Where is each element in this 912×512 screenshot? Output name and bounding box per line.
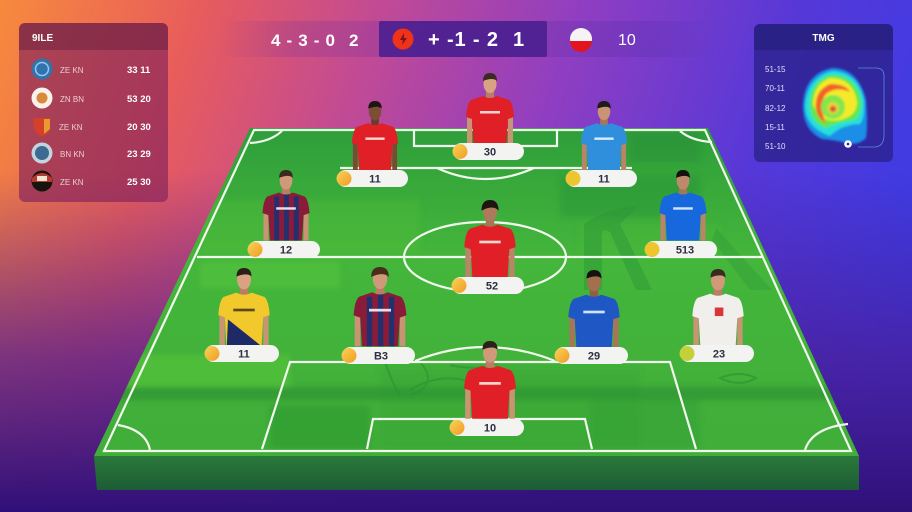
row 2: 53 20 [127,94,151,105]
row 4: BN KN [60,150,85,159]
pill: number 29 [554,347,628,364]
pill: number 12: 12 [280,244,292,256]
pill: number 11 left: 11 [369,174,381,186]
player: centre midfielder, number 52 [464,200,516,277]
player: white kit, number 23 [692,269,744,346]
heat map labels: 15-11 [765,123,785,132]
pill: number 29: 29 [588,350,600,362]
panel: team table [19,23,168,202]
row 3: 20 30 [127,122,151,133]
player: striped kit, number B3 [354,267,406,346]
formation text centre: + -1 - 2 [428,29,498,51]
centre panel [379,21,547,57]
formation text left: 4 - 3 - 0 [271,31,335,50]
player: forward, number 30 [466,73,514,145]
row 5: ZE KN [60,178,84,187]
row 3 [33,118,151,136]
panel title: 9ILE [32,33,53,44]
heat map labels [765,65,786,151]
score right: 10 [618,32,636,49]
heat map labels: 82-12 [765,104,786,113]
row 2 [32,88,151,108]
pill: number 513 [644,241,717,258]
icon: flag badge [570,28,592,52]
player: blue kit, number 29 [568,270,620,347]
score bar [220,21,720,57]
row 1: 33 11 [127,65,151,76]
score centre: 1 [513,29,524,51]
player: yellow kit, number 11 [218,268,270,345]
heat map header [754,24,893,50]
player: wing back, number 12 [262,170,310,241]
pill: number 52 [452,277,524,294]
pill: number 513: 513 [676,244,694,256]
pill: number 11 yellow [204,345,279,362]
mowing patches [90,132,870,450]
heat map chart [803,68,884,148]
row 4 [32,142,151,164]
heat map title: TMG [812,33,835,44]
panel: heat map [754,24,893,162]
panel header [19,23,168,50]
pill: number B3: B3 [374,350,388,362]
pill: number 10: 10 [484,422,496,434]
heat map labels: 70-11 [765,84,785,93]
pill: number B3 [342,347,415,364]
pill: number 11 left [336,170,408,187]
row 3: ZE KN [59,123,83,132]
player: midfielder, number 11 left [352,101,398,170]
heat map labels: 51-15 [765,65,786,74]
pitch base slab [94,456,859,490]
row 5: 25 30 [127,177,151,188]
row 4: 23 29 [127,149,151,160]
pill: number 10 [450,419,524,436]
score left: 2 [349,31,358,50]
pill: number 52: 52 [486,280,498,292]
pill: number 30 [452,143,524,160]
player: goalkeeper, number 10 [464,341,516,419]
player: midfielder, number 11 right [581,101,627,170]
row 1 [32,58,151,80]
row 5 [32,170,151,192]
pill: number 23: 23 [713,348,725,360]
pin marker [844,140,852,148]
grass surface [94,128,859,456]
pill: number 11 right: 11 [598,174,610,186]
pitch lines [104,130,851,451]
pill: number 23 [680,345,754,362]
row 2: ZN BN [60,95,84,104]
row 1: ZE KN [60,66,84,75]
heat map labels: 51-10 [765,142,786,151]
pill: number 30: 30 [484,146,496,158]
bar background [220,21,720,57]
player: wing back, number 513 [659,170,707,241]
pill: number 11 right [566,170,637,187]
pill: number 11 yellow: 11 [238,348,250,360]
icon: red team badge [392,28,414,50]
pill: number 12 [248,241,320,258]
pitch [90,128,870,490]
